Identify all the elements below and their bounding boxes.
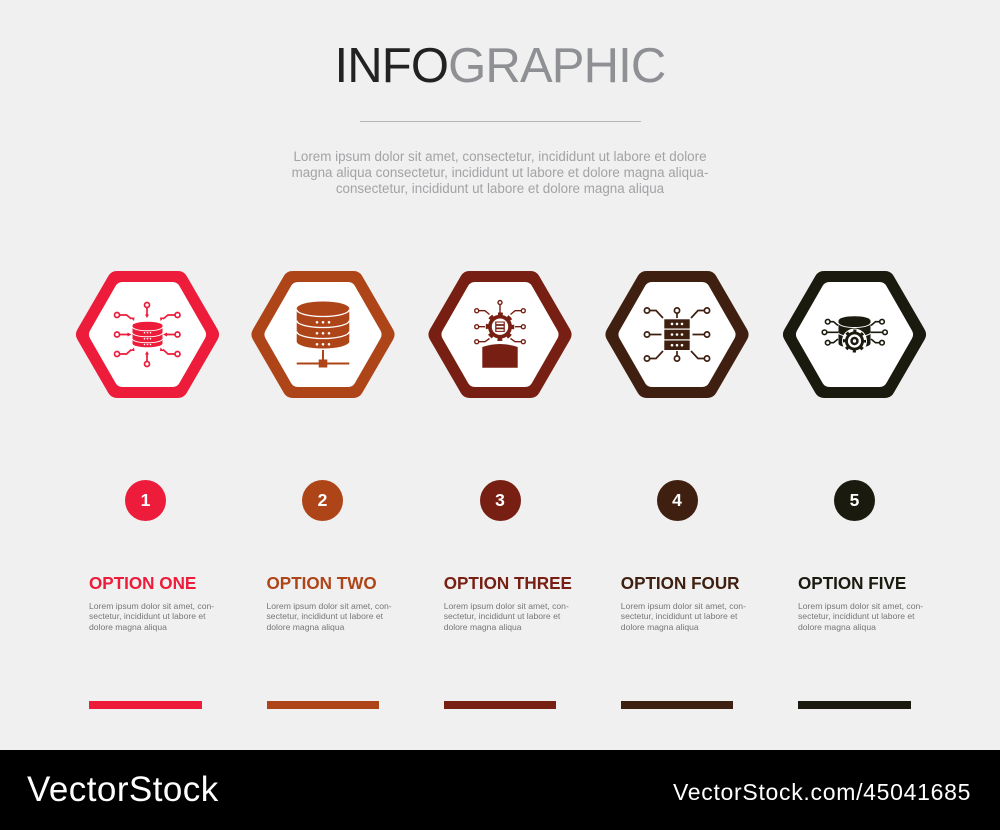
- option three text: Lorem ipsum dolor sit amet, con-: [444, 600, 569, 610]
- number badge 2: 2: [318, 490, 327, 510]
- option four text: dolore magna aliqua: [621, 622, 699, 632]
- option one heading: OPTION ONE: [89, 574, 196, 592]
- icon 3: gear with server and user: [438, 281, 562, 388]
- option five text: Lorem ipsum dolor sit amet, con-: [798, 600, 923, 610]
- option two text: sectetur, incididunt ut labore et: [266, 611, 383, 621]
- option four bar: [621, 701, 733, 708]
- divider line: [360, 121, 641, 122]
- option three text: [444, 600, 569, 632]
- intro text: Lorem ipsum dolor sit amet, consectetur, incididunt ut labore et dolore: [293, 149, 707, 164]
- option one text: dolore magna aliqua: [89, 622, 167, 632]
- icon 2: server database on network: [262, 281, 384, 388]
- option two text: [266, 600, 392, 632]
- footer bar: [0, 750, 1000, 830]
- number badge 4: [656, 480, 698, 521]
- number badge 3: [480, 480, 520, 521]
- footer url: VectorStock.com/45041685: [673, 779, 971, 805]
- option one text: Lorem ipsum dolor sit amet, con-: [89, 600, 214, 610]
- intro text: consectetur, incididunt ut labore et dolore magna aliqua: [336, 181, 664, 196]
- number badge 1: 1: [141, 490, 150, 510]
- option four text: Lorem ipsum dolor sit amet, con-: [621, 600, 746, 610]
- option five text: dolore magna aliqua: [798, 622, 876, 632]
- option one text: sectetur, incididunt ut labore et: [89, 611, 206, 621]
- number badge 5: 5: [850, 490, 859, 510]
- option five text: [798, 600, 923, 632]
- option one text: [89, 600, 214, 632]
- intro text: magna aliqua consectetur, incididunt ut labore et dolore magna aliqua-: [292, 165, 708, 180]
- icon 1: database with inbound connectors: [86, 281, 209, 388]
- option three heading: OPTION THREE: [444, 574, 572, 592]
- option two text: Lorem ipsum dolor sit amet, con-: [266, 600, 392, 610]
- icon 5: database with gear and circuit nodes: [793, 281, 916, 388]
- number badge 4: 4: [672, 490, 682, 510]
- number badge 5: [834, 480, 875, 521]
- hexagon icons: [76, 271, 926, 398]
- option two text: dolore magna aliqua: [266, 622, 344, 632]
- number badge 2: [302, 480, 343, 521]
- number badge 3: 3: [495, 490, 505, 510]
- option three bar: [444, 701, 556, 708]
- option three text: sectetur, incididunt ut labore et: [444, 611, 560, 621]
- option four text: sectetur, incididunt ut labore et: [621, 611, 737, 621]
- option four heading: OPTION FOUR: [621, 574, 740, 592]
- option three text: dolore magna aliqua: [444, 622, 522, 632]
- option two bar: [266, 701, 379, 708]
- title: INFOGRAPHIC: [334, 39, 665, 93]
- footer logo: VectorStock: [27, 770, 219, 808]
- intro text: [292, 149, 708, 196]
- option two heading: OPTION TWO: [266, 574, 377, 592]
- number badge 1: [125, 480, 166, 521]
- option five bar: [798, 701, 910, 708]
- option four text: [621, 600, 746, 632]
- option five text: sectetur, incididunt ut labore et: [798, 611, 915, 621]
- icon 4: server rack with circuit nodes: [616, 281, 738, 388]
- option five heading: OPTION FIVE: [798, 574, 906, 592]
- option one bar: [89, 701, 202, 708]
